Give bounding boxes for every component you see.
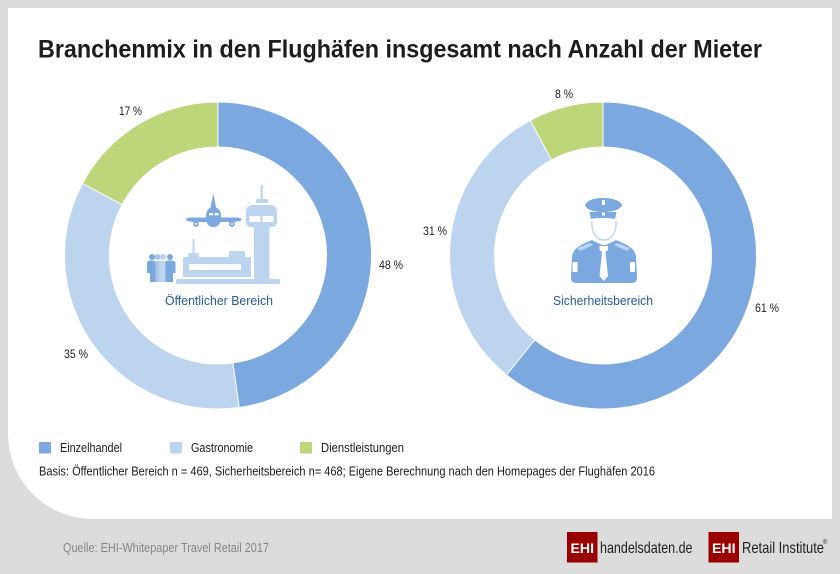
icon: epaulets [577,243,630,251]
icon: collar and tie [600,246,608,281]
value labels: Sicherheitsbereich: 31 % [423,224,447,238]
icon: terminal building [176,239,280,284]
value labels: Öffentlicher Bereich: 17 % [119,104,142,118]
logo: EHI Retail Institute [708,532,828,562]
icon: control tower [246,185,277,280]
center label: Sicherheitsbereich: Sicherheitsbereich [553,294,653,308]
legend item: Einzelhandel [39,441,122,455]
value labels: Sicherheitsbereich: 61 % [755,301,779,315]
icon: travellers [147,254,176,282]
icon: face outline [592,221,616,240]
icon: cap [585,198,622,219]
value labels: Sicherheitsbereich [423,87,779,315]
legend item: Einzelhandel: Einzelhandel [60,441,122,455]
logo: EHI Retail Institute: ® [823,539,828,546]
icon: security officer [571,198,637,283]
legend [39,441,404,455]
icon: airplane [186,194,242,227]
logo: EHI handelsdaten.de: EHI [570,541,594,556]
center label: Öffentlicher Bereich: Öffentlicher Bereich [165,294,273,308]
logo: EHI handelsdaten.de [567,532,693,562]
title: Branchenmix in den Flughäfen insgesamt nach Anzahl der Mieter [38,36,762,64]
icon: sleeve marks [572,262,635,272]
logo: EHI handelsdaten.de: handelsdaten.de [600,540,693,557]
legend item: Gastronomie [170,441,253,455]
logo: EHI Retail Institute: EHI [712,541,736,556]
source note: Quelle: EHI-Whitepaper Travel Retail 2017 [63,541,269,555]
value labels: Öffentlicher Bereich [64,104,403,361]
legend item: Gastronomie: Gastronomie [191,441,253,455]
icon: airport [147,185,280,284]
basis note: Basis: Öffentlicher Bereich n = 469, Sicherheitsbereich n= 468; Eigene Berechnung nach den Homepages der Flughäfen 2016 [39,464,655,478]
donut chart: Sicherheitsbereich [472,101,734,386]
donut chart: Öffentlicher Bereich [82,101,349,408]
legend item: Dienstleistungen: Dienstleistungen [321,441,404,455]
value labels: Öffentlicher Bereich: 48 % [379,258,403,272]
icon: uniform [571,240,637,283]
value labels: Öffentlicher Bereich: 35 % [64,347,88,361]
value labels: Sicherheitsbereich: 8 % [555,87,573,101]
